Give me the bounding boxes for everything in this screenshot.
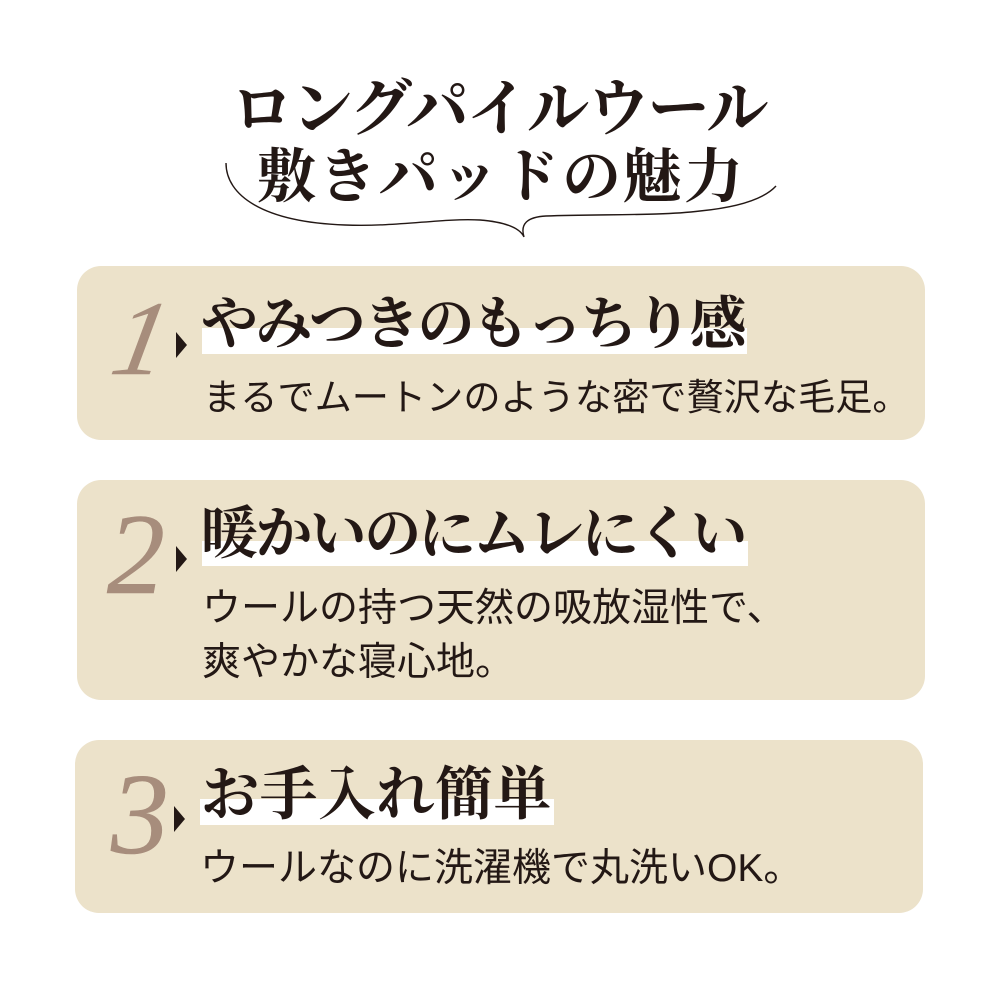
number 2: 2: [107, 491, 165, 619]
heading highlight 3: [200, 799, 554, 825]
heading 3: お手入れ簡単: [201, 762, 552, 827]
text 1: まるでムートンのような密で贅沢な毛足。: [203, 376, 910, 418]
text 2: [202, 587, 785, 684]
text 2: ウールの持つ天然の吸放湿性で、: [202, 587, 785, 630]
heading highlight 1: [202, 328, 747, 354]
text 2: 爽やかな寝心地。: [202, 641, 514, 684]
heading 1: やみつきのもっちり感: [201, 292, 744, 356]
arrow 3: [174, 806, 185, 832]
panel: feature 2: [77, 480, 925, 700]
arrow 2: [176, 546, 187, 572]
number 3: 3: [111, 751, 169, 879]
panel: feature 3: [75, 740, 923, 913]
heading highlight 2: [202, 541, 748, 566]
title line 2: 敷きパッドの魅力: [257, 144, 745, 210]
arrow 1: [176, 332, 187, 358]
number 1: 1: [104, 280, 179, 397]
text 3: ウールなのに洗濯機で丸洗いOK。: [200, 846, 802, 890]
title line 1: ロングパイルウール: [231, 76, 767, 144]
panel: feature 1: [77, 266, 925, 440]
heading 2: 暖かいのにムレにくい: [201, 502, 745, 566]
